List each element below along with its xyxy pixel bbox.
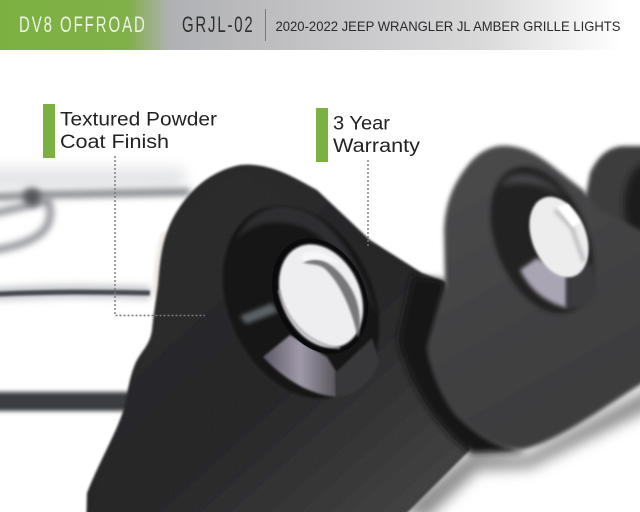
lens bright reflection — [302, 252, 340, 265]
bezel outer cone — [471, 151, 613, 329]
lens shading — [555, 210, 584, 262]
callout: 3 year warranty — [316, 108, 421, 246]
product: LED grille light bracket — [86, 146, 640, 512]
main LED bezel — [193, 180, 409, 424]
green marker bar — [43, 104, 55, 158]
bezel left glint — [240, 303, 278, 324]
header banner — [0, 0, 640, 50]
left bracket body — [86, 165, 470, 512]
lens grey streak — [302, 259, 360, 338]
callout text: 3 Year — [333, 114, 391, 134]
soft shadow under the bracket — [400, 382, 640, 512]
lens glass — [518, 188, 600, 286]
part number: GRJL-02 — [182, 12, 253, 37]
third bracket dark bezel — [624, 163, 640, 247]
bezel lit facet — [520, 258, 567, 308]
callout: 3 year warranty: Warranty — [333, 136, 421, 157]
brand name: DV8 OFFROAD — [19, 12, 145, 37]
bezel upper highlight — [500, 175, 568, 198]
left bracket rim — [156, 232, 165, 296]
middle bracket body — [427, 146, 640, 449]
seam shadow between brackets — [398, 276, 525, 454]
lens rim highlight — [279, 290, 340, 348]
callout: textured powder coat finish — [43, 104, 218, 316]
bezel right facet — [567, 262, 597, 308]
lens glass — [263, 231, 379, 361]
bezel outer cone — [193, 180, 409, 424]
bezel upper highlight — [236, 206, 377, 318]
lens dark ring — [254, 223, 386, 369]
second LED bezel, out of focus — [471, 151, 613, 329]
callout text: Textured Powder — [60, 110, 218, 130]
bezel lower right facet — [335, 338, 379, 397]
product title: 2020-2022 JEEP WRANGLER JL AMBER GRILLE LIGHTS — [276, 18, 620, 34]
lens highlight — [557, 204, 580, 227]
third bracket at right edge — [585, 146, 640, 300]
banner gradient strip — [0, 0, 640, 50]
dotted leader line — [367, 160, 369, 246]
callout: textured powder coat finish: Coat Finish — [60, 132, 169, 153]
bezel lower lit facet — [263, 335, 337, 397]
dotted leader line — [115, 156, 205, 316]
green marker bar — [316, 108, 328, 162]
divider — [265, 9, 266, 41]
fine texture over the left bracket — [90, 170, 468, 512]
